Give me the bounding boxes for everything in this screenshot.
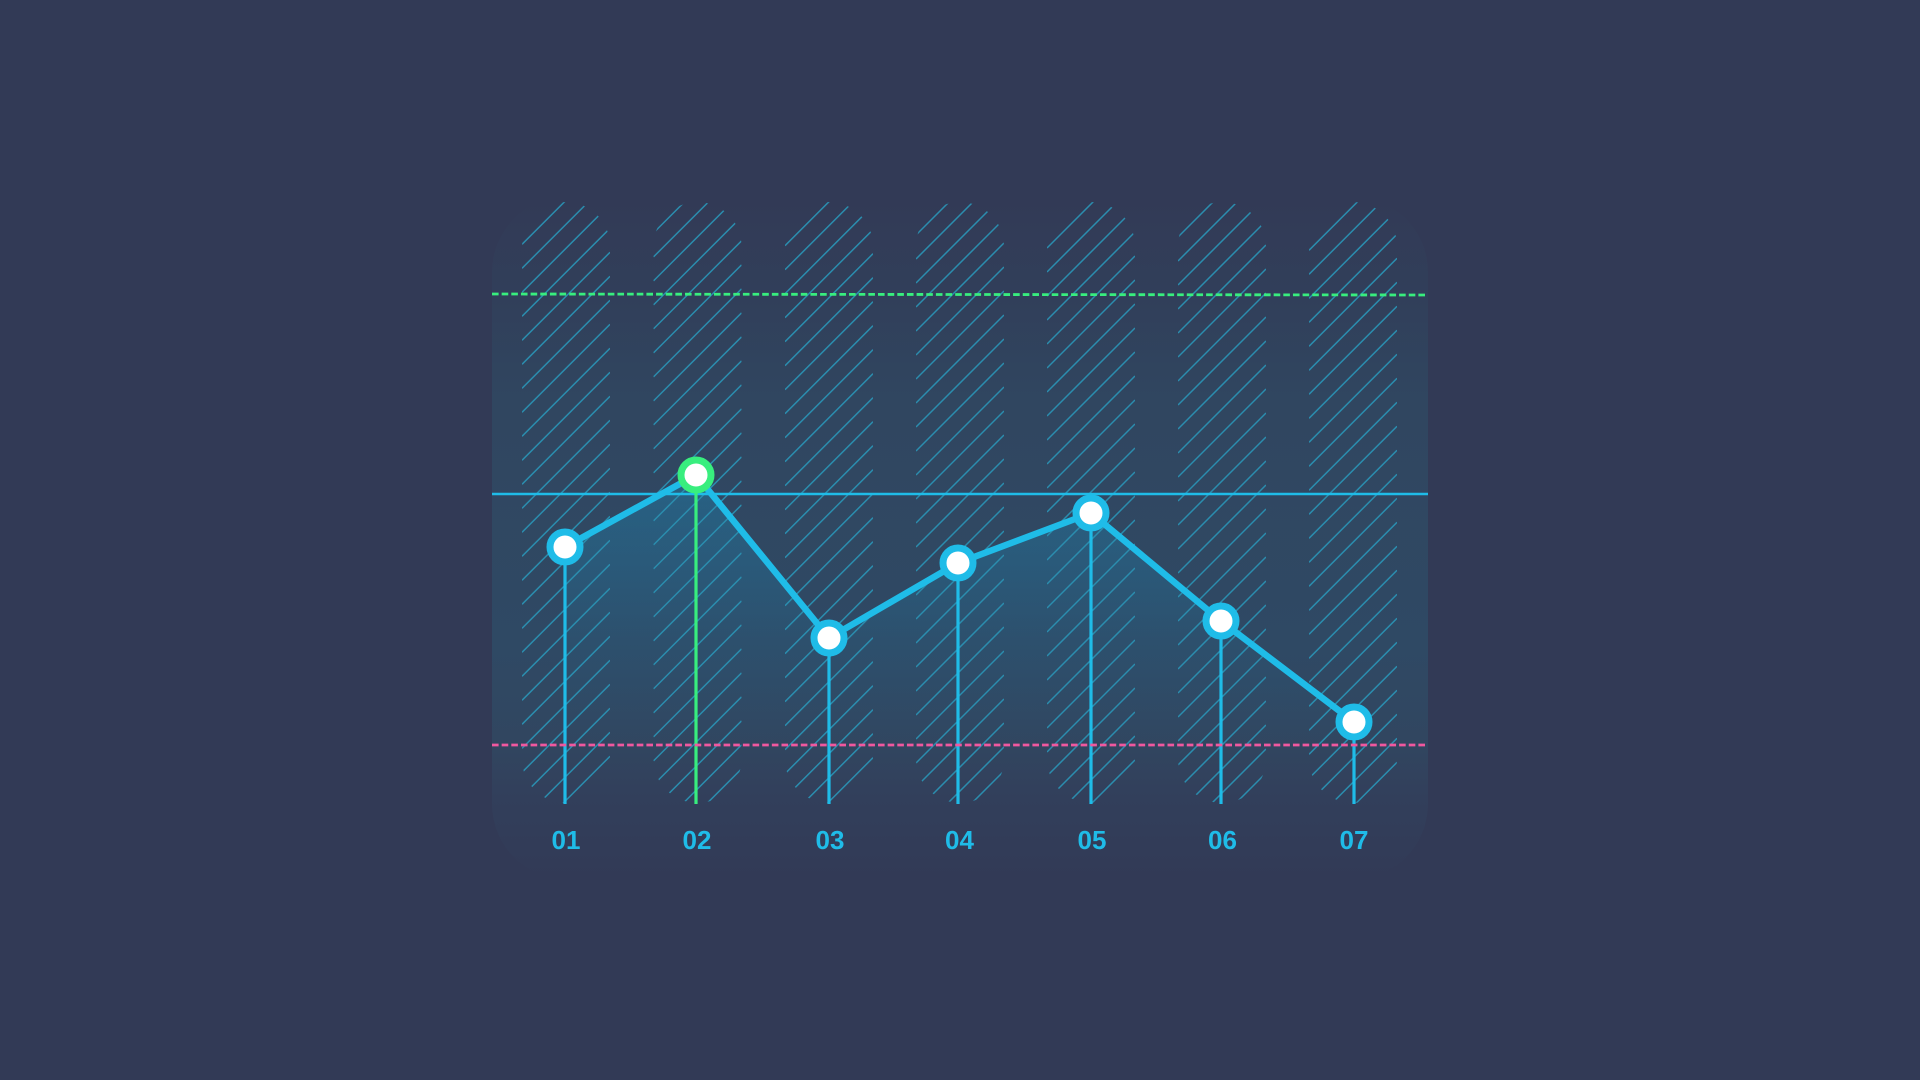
point 07 <box>1339 707 1369 737</box>
point 04 <box>943 548 973 578</box>
point 02 (peak) <box>681 460 711 490</box>
label 03: 03 <box>816 825 844 855</box>
label 06: 06 <box>1208 825 1237 855</box>
upper limit dashed line <box>492 294 1428 295</box>
panel: chart background <box>492 196 1428 880</box>
area glow under the line <box>565 475 1354 745</box>
point 01 <box>550 532 580 562</box>
label 01: 01 <box>552 825 580 855</box>
axis labels <box>552 825 1368 855</box>
data points <box>550 460 1369 737</box>
lower limit dashed line <box>492 744 1428 746</box>
line chart infographic <box>492 202 1428 850</box>
label 02: 02 <box>683 825 711 855</box>
point 05 <box>1076 498 1106 528</box>
point 06 <box>1206 606 1236 636</box>
label 05: 05 <box>1078 825 1106 855</box>
hatched columns <box>522 202 1397 803</box>
stems <box>565 475 1354 804</box>
label 04: 04 <box>945 825 974 855</box>
point 03 <box>814 623 844 653</box>
data line <box>565 475 1354 722</box>
average line <box>492 493 1428 495</box>
label 07: 07 <box>1340 825 1368 855</box>
